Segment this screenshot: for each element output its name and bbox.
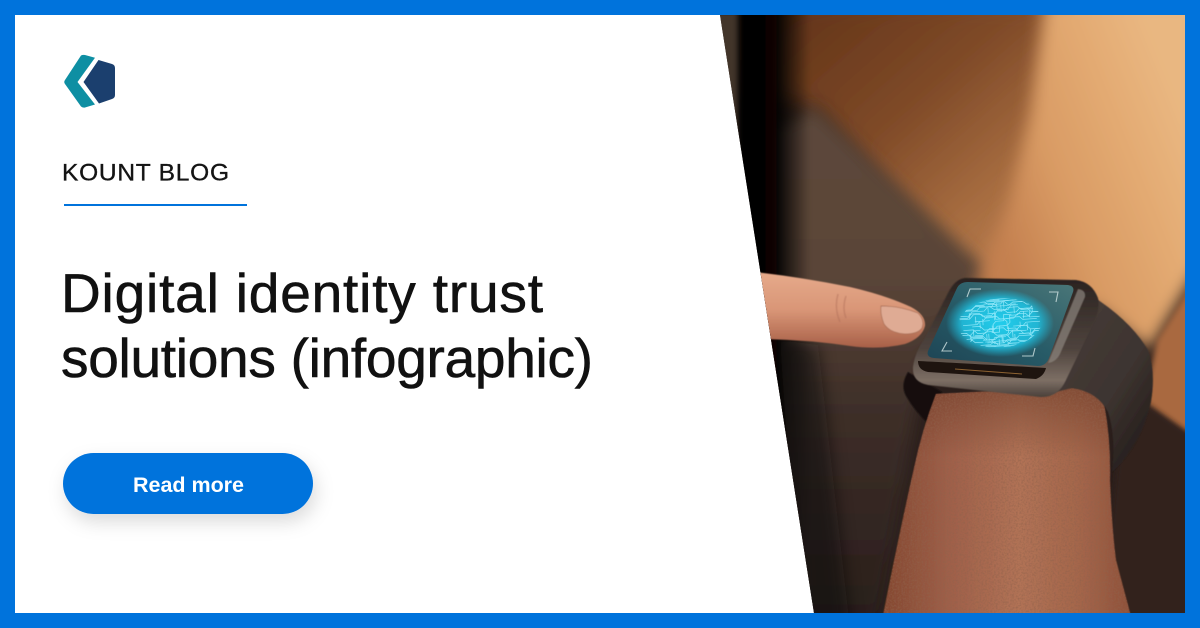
wrist: [882, 388, 1132, 620]
logo teal chevron: [64, 55, 95, 108]
strap back left: [903, 372, 942, 425]
title: solutions (infographic): [61, 327, 593, 389]
photo panel: finger touching smartwatch: [720, 0, 1200, 628]
watch case: [913, 278, 1099, 397]
bottom bezel: [918, 361, 1046, 379]
title: Digital identity trust: [61, 262, 543, 324]
brown wall top band: [1028, 15, 1032, 16]
watch strap right: [1057, 300, 1154, 470]
title: [61, 262, 593, 389]
read more button: [63, 453, 313, 514]
fingerprint circuit: [960, 298, 1040, 348]
fingerprint glow: [946, 289, 1054, 357]
fingernail: [881, 306, 923, 334]
forearm blurred: [975, 0, 1200, 350]
finger: [755, 272, 925, 348]
logo navy hexagon: [84, 60, 115, 104]
forearm top band: [1075, 15, 1185, 60]
eyebrow label: KOUNT BLOG: [62, 160, 229, 186]
knuckle creases: [836, 294, 846, 322]
watch: [913, 278, 1099, 397]
eyebrow underline: [64, 204, 247, 206]
read more button: Read more: [133, 473, 244, 497]
left dark shadow strip: [720, 0, 850, 628]
blurred sofa: [760, 108, 985, 628]
lower right sofa: [1114, 402, 1185, 537]
brown area right of arm: [1150, 292, 1185, 434]
glass edge highlight: [1048, 289, 1085, 363]
blurred brown wall: [779, 60, 1048, 278]
logo: [64, 55, 115, 108]
corner brackets: [942, 289, 1058, 356]
watch screen: [928, 282, 1073, 366]
